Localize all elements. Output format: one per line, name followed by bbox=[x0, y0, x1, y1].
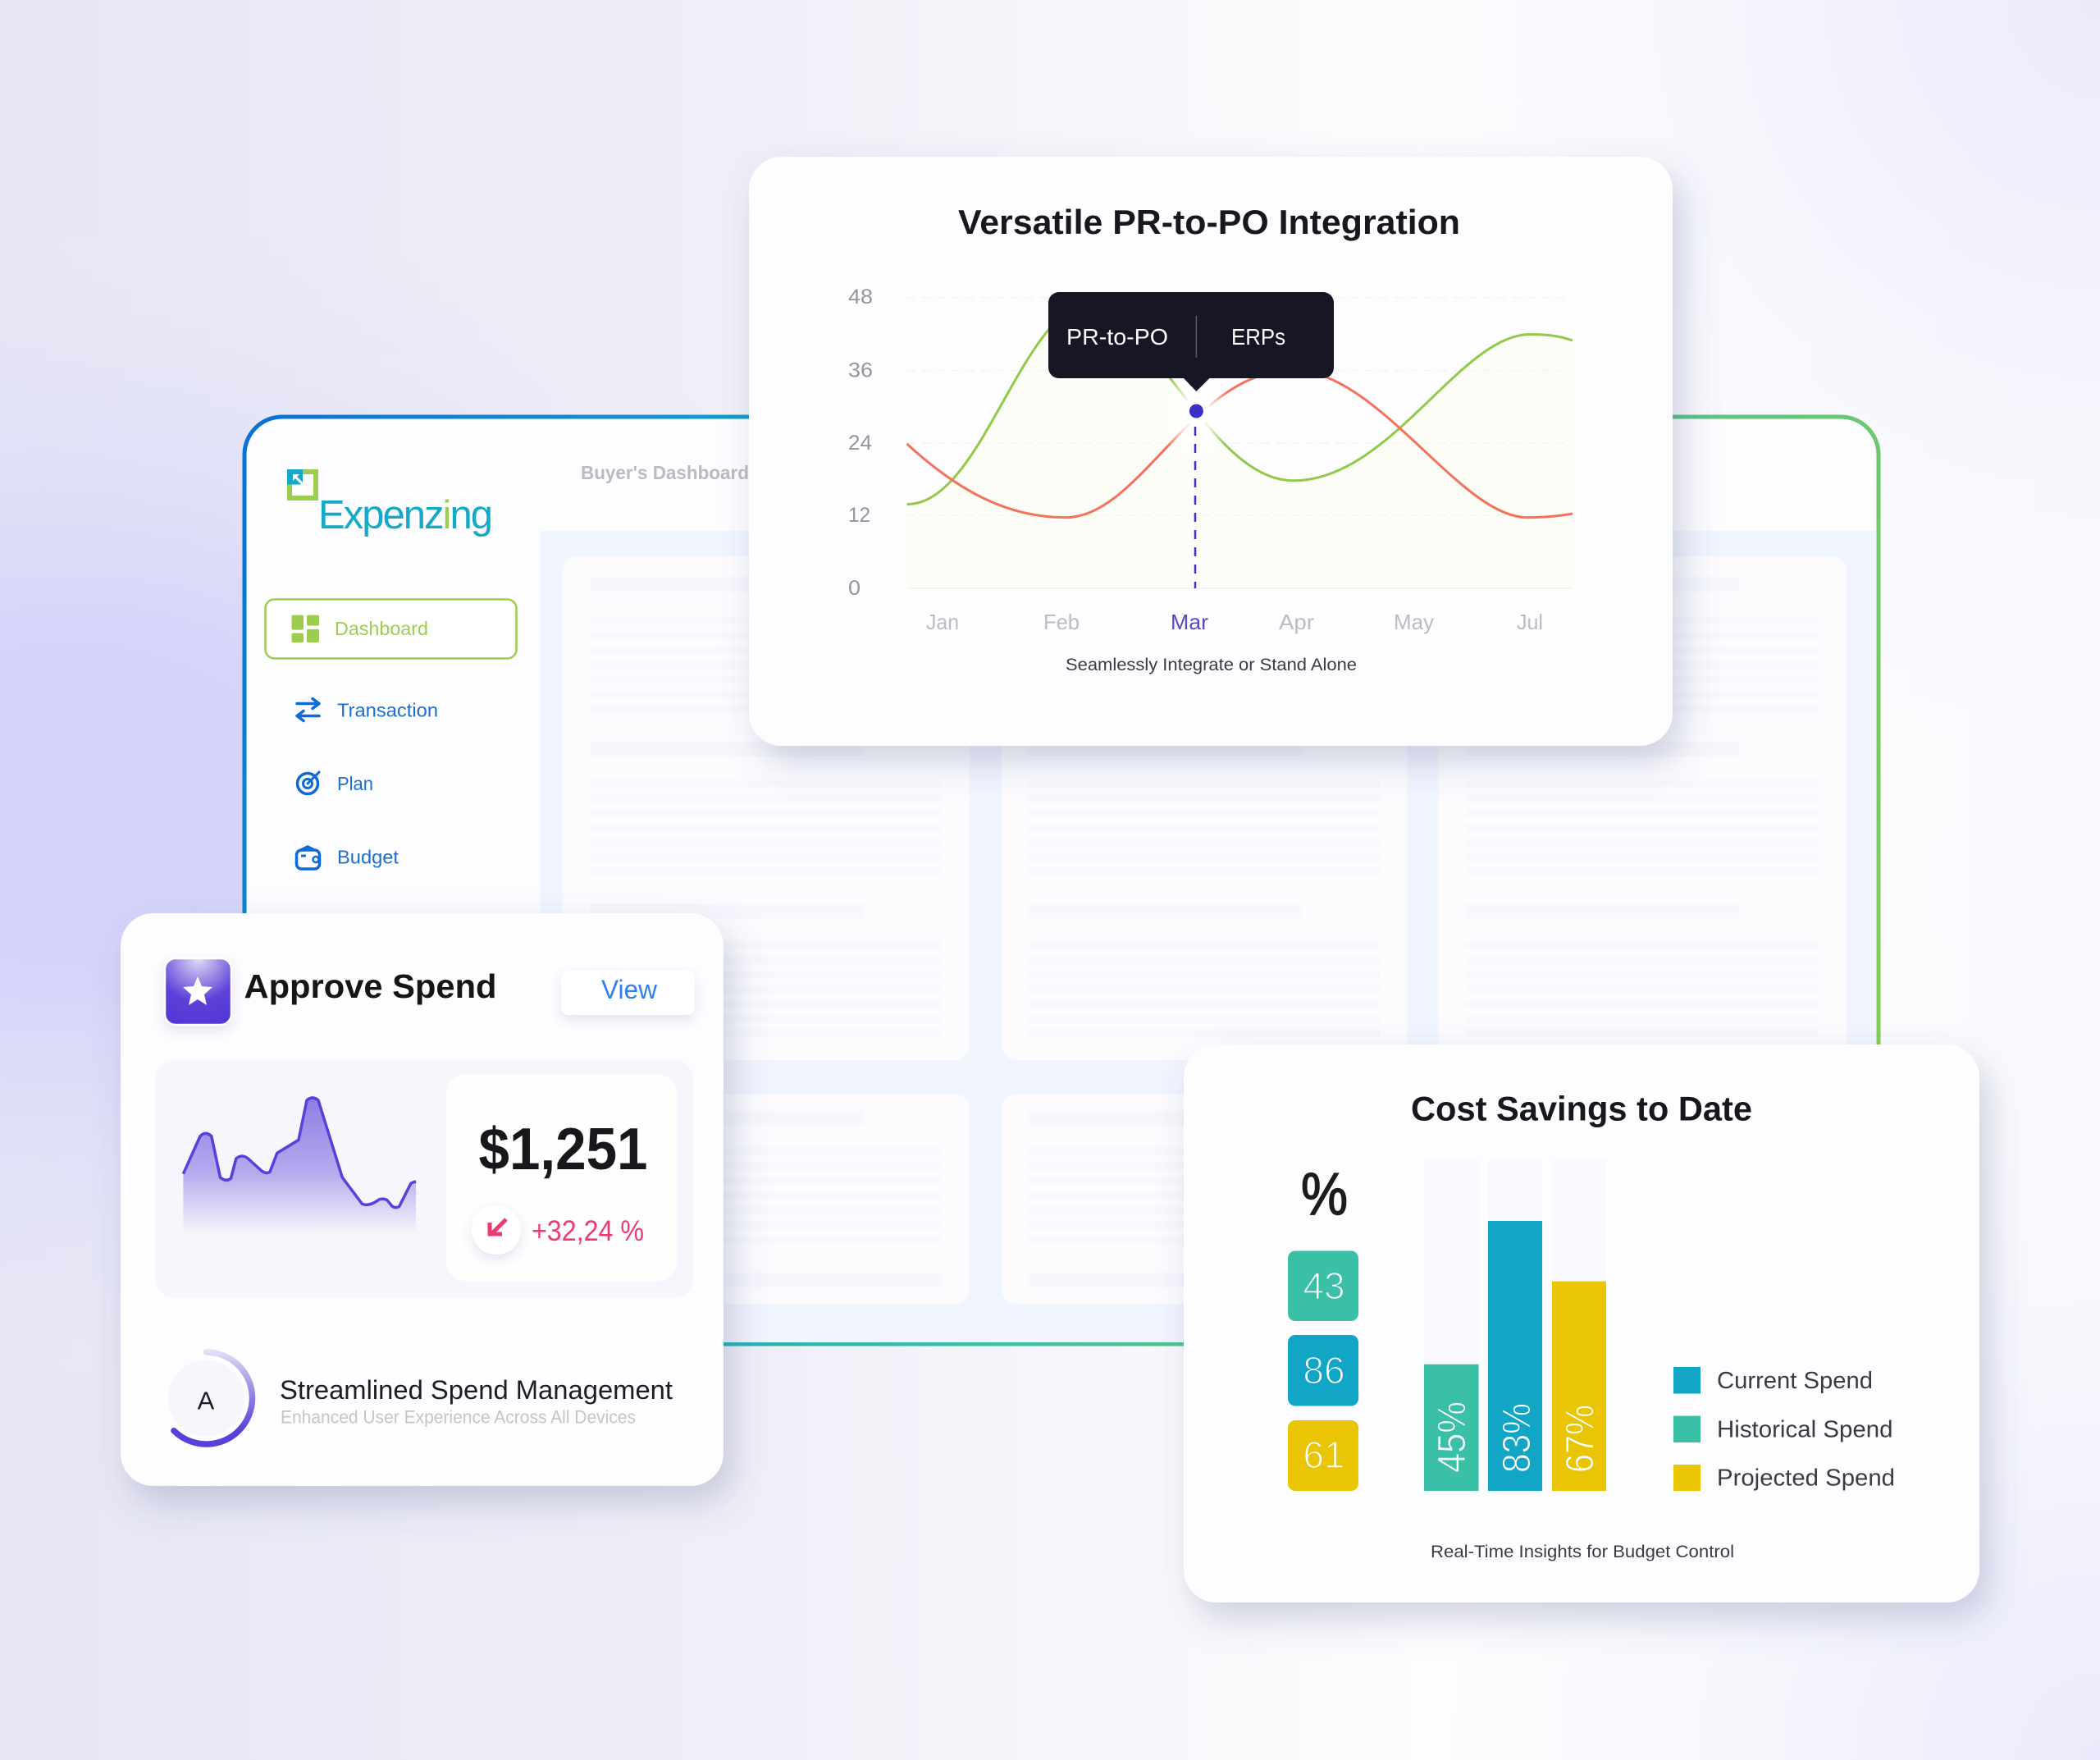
card title: Cost Savings to Date bbox=[1411, 1090, 1752, 1127]
x axis labels: Mar bbox=[1171, 610, 1208, 634]
value tile: 86: 86 bbox=[1303, 1349, 1345, 1392]
view button: View bbox=[601, 975, 658, 1004]
panel: cost savings card bbox=[1184, 1045, 1979, 1602]
skeleton card row 1 column 2 bbox=[1002, 556, 1408, 1060]
heading: buyer's dashboard: Buyer's Dashboard bbox=[581, 462, 749, 483]
bar: 67% bbox=[1552, 1159, 1606, 1491]
sidebar logo: Expenzing bbox=[318, 493, 493, 537]
heading: approve spend: Approve Spend bbox=[244, 967, 497, 1005]
skeleton card row 1 column 3 bbox=[1439, 556, 1847, 1060]
bar chart bbox=[1424, 1159, 1606, 1491]
x axis labels: Jul bbox=[1517, 610, 1543, 634]
nav item: plan bbox=[297, 772, 373, 794]
y axis labels: 24 bbox=[848, 432, 872, 455]
x axis labels: Feb bbox=[1043, 610, 1080, 634]
sparkline area chart bbox=[183, 1098, 416, 1234]
legend bbox=[1673, 1367, 1895, 1492]
stats panel bbox=[155, 1059, 693, 1298]
nav item: transaction: Transaction bbox=[337, 699, 438, 720]
icon: down-left arrow bbox=[472, 1205, 521, 1255]
marker dot bbox=[1182, 397, 1210, 425]
management text: Streamlined Spend Management bbox=[280, 1375, 673, 1405]
view button bbox=[561, 971, 695, 1015]
icon: star badge bbox=[165, 958, 231, 1025]
area under green series bbox=[907, 299, 1573, 588]
value tile: 61: 61 bbox=[1303, 1433, 1345, 1476]
bar: 67%: 67% bbox=[1559, 1405, 1602, 1473]
chart caption: Seamlessly Integrate or Stand Alone bbox=[1066, 656, 1357, 674]
value tile: 43: 43 bbox=[1303, 1264, 1345, 1307]
y axis labels: 0 bbox=[848, 577, 861, 600]
skeleton card row 1 column 1 bbox=[563, 556, 970, 1060]
percent symbol: % bbox=[1301, 1162, 1348, 1227]
value tile: 43 bbox=[1288, 1250, 1358, 1321]
tooltip: PR-to-PO bbox=[1066, 324, 1168, 350]
x axis labels: Jan bbox=[926, 610, 959, 634]
legend: Projected Spend bbox=[1717, 1465, 1895, 1492]
chart caption: Real-Time Insights for Budget Control bbox=[1431, 1543, 1734, 1561]
bar: 83% bbox=[1488, 1159, 1542, 1491]
value tile: 61 bbox=[1288, 1420, 1358, 1491]
y axis labels bbox=[848, 286, 873, 600]
percentage change: +32,24 % bbox=[532, 1215, 644, 1247]
management text bbox=[280, 1375, 673, 1428]
nav item: transaction bbox=[297, 699, 438, 720]
legend: Current Spend bbox=[1717, 1368, 1873, 1394]
x axis labels: May bbox=[1394, 610, 1434, 634]
skeleton card row 2 column 2 bbox=[1002, 1095, 1408, 1304]
x axis labels: Apr bbox=[1279, 610, 1314, 634]
nav item: dashboard bbox=[266, 599, 517, 658]
nav item: dashboard: Dashboard bbox=[335, 618, 428, 639]
progress ring avatar bbox=[168, 1352, 252, 1444]
line chart bbox=[848, 286, 1573, 634]
legend: Historical Spend bbox=[1717, 1416, 1893, 1442]
content area background bbox=[540, 531, 1876, 1342]
tooltip: ERPs bbox=[1231, 324, 1285, 350]
bar: 83%: 83% bbox=[1495, 1403, 1539, 1473]
bar: 45% bbox=[1424, 1159, 1478, 1491]
panel: dashboard window bbox=[244, 417, 1879, 1344]
value tile bbox=[446, 1074, 677, 1281]
green series line bbox=[907, 299, 1573, 505]
skeleton card row 2 column 1 bbox=[563, 1095, 970, 1304]
amount: $1,251 bbox=[479, 1117, 648, 1182]
red series line bbox=[907, 370, 1573, 518]
x axis labels bbox=[926, 610, 1543, 634]
management text: Enhanced User Experience Across All Devices bbox=[281, 1406, 636, 1428]
panel: PR-to-PO integration chart card bbox=[749, 157, 1673, 746]
panel: approve spend card bbox=[121, 913, 724, 1486]
y axis labels: 48 bbox=[848, 286, 873, 309]
marker glow bbox=[1160, 363, 1232, 465]
y axis labels: 36 bbox=[848, 359, 873, 382]
card title: Versatile PR-to-PO Integration bbox=[958, 203, 1460, 241]
nav item: budget bbox=[297, 847, 399, 869]
tooltip bbox=[1048, 292, 1334, 391]
nav item: budget: Budget bbox=[337, 847, 399, 868]
dashed marker line bbox=[1194, 427, 1196, 588]
value tile: 86 bbox=[1288, 1335, 1358, 1406]
progress ring avatar: A bbox=[198, 1387, 215, 1415]
y axis labels: 12 bbox=[848, 504, 870, 527]
nav item: plan: Plan bbox=[337, 773, 373, 794]
sidebar logo bbox=[287, 469, 493, 537]
bar: 45%: 45% bbox=[1431, 1401, 1474, 1473]
